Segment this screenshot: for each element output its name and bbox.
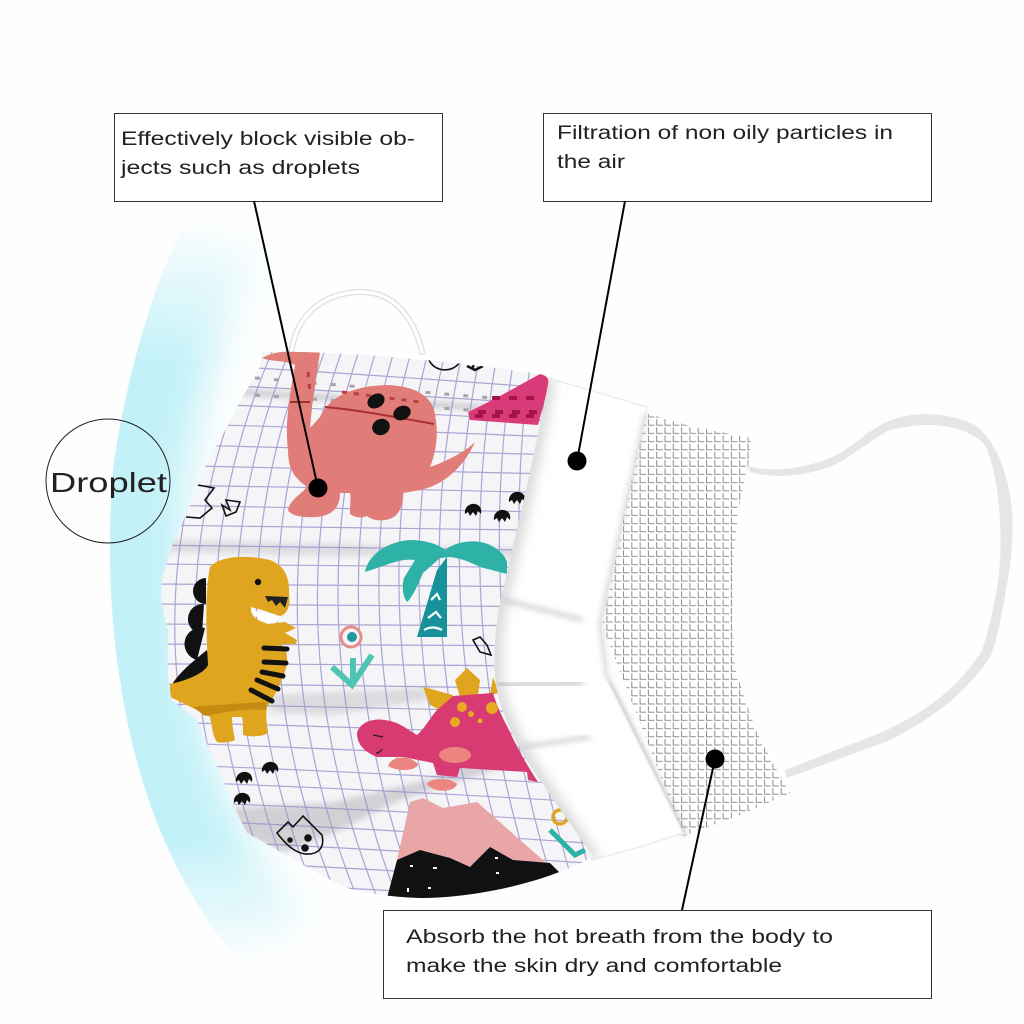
callout: block droplets bbox=[114, 114, 442, 202]
callout: absorb breath: make the skin dry and comfortable bbox=[406, 956, 782, 977]
yellow t-rex bbox=[170, 557, 297, 743]
pink triangle dinosaur bbox=[468, 374, 549, 425]
droplet shield arc bbox=[110, 205, 250, 975]
leader line: middle layer bbox=[568, 201, 625, 470]
palm tree bbox=[365, 540, 507, 637]
leader line: outer layer bbox=[254, 201, 328, 498]
callout: block droplets: jects such as droplets bbox=[120, 158, 360, 179]
white front band bbox=[494, 378, 683, 860]
footprints bbox=[234, 492, 525, 805]
pink stegosaurus bbox=[357, 668, 538, 791]
callout: block droplets: Effectively block visible ob- bbox=[121, 129, 415, 150]
line-art eggs bbox=[186, 356, 491, 854]
front printed mask bbox=[140, 340, 600, 910]
droplet label circle: Droplet bbox=[50, 467, 167, 498]
inner mesh panel bbox=[602, 413, 790, 836]
callout: filtration bbox=[544, 114, 932, 202]
flower bbox=[332, 627, 372, 685]
callout: absorb breath bbox=[384, 910, 932, 998]
left ear loop bbox=[291, 292, 422, 352]
right ear loop bbox=[748, 414, 1013, 778]
callout: filtration: the air bbox=[557, 152, 626, 173]
pink long-neck dinosaur bbox=[262, 351, 475, 520]
stitching dots bbox=[254, 376, 488, 412]
grid lines bbox=[150, 341, 600, 904]
small yellow flower and leaf bbox=[550, 810, 585, 855]
fabric fold shading bbox=[160, 389, 540, 852]
droplet label circle bbox=[46, 419, 170, 543]
leader line: inner layer bbox=[682, 750, 724, 910]
callout: filtration: Filtration of non oily particles in bbox=[557, 123, 893, 144]
callout: absorb breath: Absorb the hot breath from the body to bbox=[406, 927, 833, 948]
volcano bbox=[388, 798, 560, 898]
